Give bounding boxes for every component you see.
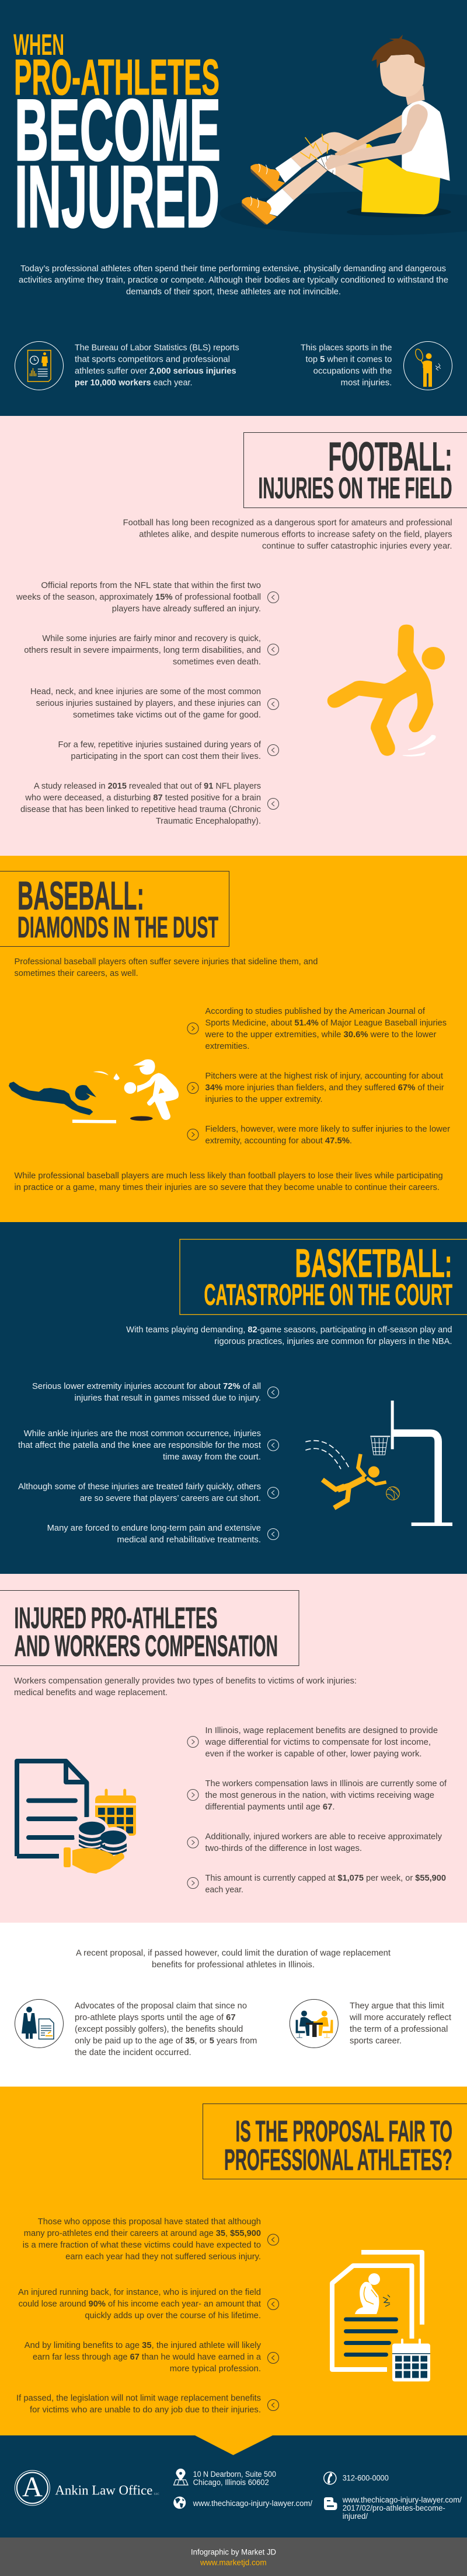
text: football introduction: Football has long been recognized as a dangerous sport for amateurs and professional [123, 518, 452, 527]
text: basketball introduction: rigorous practices, injuries are common for players in the NBA. [214, 1337, 452, 1346]
text: wage replacement point 1: In Illinois, wage replacement benefits are designed to provide [205, 1726, 438, 1735]
text: baseball point 2: 34% more injuries than fielders, and they suffered 67% of their [205, 1083, 444, 1093]
text: baseball point 1: were to the upper extremities, while 30.6% were to the lower [204, 1030, 437, 1040]
icon: document with clock and injured person [15, 342, 63, 390]
icon: chevron 2 [187, 1083, 198, 1093]
text: address: 10 N Dearborn, Suite 500 [193, 2470, 276, 2479]
icon: globe [173, 2497, 186, 2509]
title: When Pro-Athletes Become Injured: PRO-ATHLETES [14, 50, 219, 106]
icon: chevron 2 [187, 1790, 198, 1800]
icon: chevron 3 [187, 1129, 198, 1140]
text: top 5 occupations: occupations with the [313, 366, 392, 376]
text: basketball point 2 [18, 1429, 261, 1462]
text: advocates claim: pro-athlete plays sports until the age of 67 [75, 2013, 236, 2022]
panel: hero introduction [0, 0, 467, 416]
text: BLS statistic [75, 343, 239, 387]
text: fairness point 2: An injured running back, for instance, who is injured on the field [18, 2288, 261, 2297]
text: blog link: injured/ [343, 2512, 368, 2521]
text: football point 1 [16, 581, 261, 614]
text: workers compensation introduction [14, 1676, 357, 1698]
text: football point 1: Official reports from the NFL state that within the first two [41, 581, 261, 590]
text: wage replacement point 4: each year. [205, 1885, 243, 1895]
text: football point 5: Traumatic Encephalopathy). [156, 817, 261, 826]
text: basketball point 1: Serious lower extremity injuries account for about 72% of all [32, 1382, 261, 1391]
panel: workers compensation [0, 1574, 467, 1923]
text: football point 1: players have already suffered an injury. [112, 604, 261, 614]
icon: chevron 4 [267, 1528, 279, 1540]
heading: Football, injuries on the field [244, 433, 467, 508]
text: fairness point 4 [16, 2394, 261, 2415]
panel: baseball [0, 856, 467, 1222]
text: wage replacement point 4 [205, 1874, 446, 1895]
text: blog link: www.thechicago-injury-lawyer.com/ [342, 2496, 462, 2504]
text: introduction paragraph [19, 264, 448, 296]
text: football introduction: continue to suffer catastrophic injuries every year. [262, 541, 452, 551]
text: football point 2: others result in severe impairments, long term disabilities, and [24, 646, 261, 655]
text: wage replacement point 3: Additionally, injured workers are able to receive approximately [205, 1832, 442, 1842]
icon: chevron 3 [267, 699, 279, 709]
text: wage replacement point 1: wage differential for victims to compensate for lost income, [204, 1738, 431, 1747]
text: basketball point 4: medical and rehabilitative treatments. [117, 1535, 261, 1545]
text: football point 5: A study released in 2015 revealed that out of 91 NFL players [34, 782, 261, 791]
text: basketball point 1: injuries that result in games missed due to injury. [75, 1394, 261, 1403]
panel: credits [0, 2538, 467, 2576]
text: fairness point 1: is a mere fraction of what these victims could have expected to [23, 2241, 261, 2250]
text: basketball introduction: With teams playing demanding, 82-game seasons, participating in off-season play and [126, 1325, 452, 1335]
heading: Is the proposal fair to professional athletes? [203, 2104, 467, 2179]
icon: chevron 3 [267, 1488, 279, 1498]
illustration: falling football player [327, 625, 445, 757]
icon: chevron 1 [187, 1736, 198, 1748]
arrow: yellow notch pointing down [195, 2435, 273, 2455]
text: BLS statistic: per 10,000 workers each year. [75, 378, 193, 387]
text: fairness point 2: could lose around 90% of his income each year- an amount that [19, 2300, 261, 2309]
text: top 5 occupations: This places sports in the [301, 343, 392, 352]
text: fairness point 3: And by limiting benefits to age 35, the injured athlete will likely [25, 2341, 262, 2350]
text: BLS statistic: The Bureau of Labor Statistics (BLS) reports [75, 343, 239, 352]
text: blog link [342, 2496, 462, 2521]
text: fairness point 4: If passed, the legislation will not limit wage replacement benefits [16, 2394, 261, 2403]
icon: chevron 3 [267, 2352, 279, 2364]
text: football point 3: serious injuries sustained by players, and these injuries can [36, 699, 261, 708]
text: argument about the limit [349, 2001, 451, 2046]
text: argument about the limit: will more accurately reflect [349, 2013, 451, 2022]
text: basketball point 3 [18, 1482, 261, 1503]
text: wage replacement point 2 [205, 1779, 447, 1812]
text: baseball point 3 [205, 1125, 450, 1146]
text: football point 4: participating in the sport can cost them their lives. [71, 752, 261, 761]
text: top 5 occupations: top 5 when it comes to [306, 355, 392, 364]
text: baseball point 2: injuries to the upper extremity. [205, 1095, 323, 1104]
logo: Ankin Law Office: LLC [154, 2492, 159, 2496]
text: workers compensation introduction: medical benefits and wage replacement. [14, 1688, 168, 1698]
text: wage replacement point 2: the most generous in the nation, with victims receiving wage [205, 1791, 434, 1800]
text: introduction paragraph: Today’s professional athletes often spend their time performing extensive, physically demanding and dangerous [20, 264, 446, 274]
text: fairness point 1 [23, 2217, 261, 2262]
text: baseball point 3: Fielders, however, were more likely to suffer injuries to the lower [205, 1125, 450, 1134]
text: website: www.thechicago-injury-lawyer.com/ [193, 2499, 312, 2508]
logo: Ankin Law Office [15, 2470, 159, 2505]
text: baseball introduction [14, 957, 318, 978]
text: fairness point 1: Those who oppose this proposal have stated that although [38, 2217, 261, 2227]
text: basketball point 3: Although some of these injuries are treated fairly quickly, others [18, 1482, 261, 1492]
text: basketball point 3: are so severe that players’ careers are cut short. [80, 1494, 261, 1503]
text: infographic credit: Infographic by Market JD [191, 2548, 276, 2556]
icon: injured tennis player [404, 342, 452, 390]
icon: chevron 2 [267, 1440, 279, 1451]
icon: chevron 1 [267, 2234, 279, 2245]
text: argument about the limit: sports career. [350, 2036, 402, 2046]
text: credit website: www.marketjd.com [200, 2558, 267, 2567]
icon: judge and legal document [15, 2000, 63, 2048]
illustration: injured athlete sitting and holding knee [220, 34, 467, 235]
text: wage replacement point 1: even if the worker is capable of other, lower paying work. [205, 1749, 421, 1759]
text: wage replacement point 4: This amount is currently capped at $1,075 per week, or $55,900 [205, 1874, 446, 1883]
icon: chevron 4 [267, 744, 279, 756]
panel: football [0, 416, 467, 856]
panel: is the proposal fair [0, 2087, 467, 2435]
title: When Pro-Athletes Become Injured: WHEN [13, 28, 64, 61]
illustration: baseball player sliding to base [9, 1059, 179, 1124]
logo: Ankin Law Office: Ankin Law Office [55, 2483, 152, 2498]
text: basketball introduction [126, 1325, 452, 1346]
text: baseball closing paragraph: in practice or a game, many times their injuries are so severe that they become unable to continue their careers. [14, 1183, 440, 1192]
text: football point 3 [30, 687, 261, 720]
icon: chevron 3 [187, 1837, 198, 1848]
text: proposal statement [76, 1948, 391, 1969]
text: football point 5: disease that has been linked to repetitive head trauma (Chronic [20, 805, 261, 814]
text: baseball point 1: extremities. [205, 1042, 250, 1051]
panel: footer contact [0, 2435, 467, 2538]
text: baseball point 1: According to studies published by the American Journal of [205, 1007, 426, 1016]
text: football point 1: weeks of the season, approximately 15% of professional football [16, 593, 261, 602]
text: baseball point 1: Sports Medicine, about 51.4% of Major League Baseball injuries [205, 1019, 447, 1028]
icon: chevron 4 [187, 1877, 198, 1889]
text: basketball point 2: While ankle injuries are the most common occurrence, injuries [24, 1429, 261, 1438]
illustration: basketball player falling under hoop [305, 1401, 452, 1526]
text: BLS statistic: that sports competitors and professional [75, 355, 230, 364]
icon: chevron 5 [267, 798, 279, 810]
text: football introduction [123, 518, 452, 551]
text: baseball point 3: extremity, accounting for about 47.5%. [205, 1136, 352, 1146]
text: top 5 occupations: most injuries. [341, 378, 392, 387]
logo: Ankin Law Office: A [22, 2470, 43, 2502]
text: wage replacement point 3: two-thirds of the difference in lost wages. [205, 1844, 362, 1853]
text: baseball point 1 [204, 1007, 447, 1051]
text: fairness point 2: quickly adds up over the course of his lifetime. [85, 2311, 261, 2320]
text: top 5 occupations [301, 343, 392, 387]
text: workers compensation introduction: Workers compensation generally provides two types of benefits to victims of work injuries: [14, 1676, 357, 1686]
icon: chevron 1 [187, 1023, 198, 1034]
text: blog link: 2017/02/pro-athletes-become- [343, 2504, 445, 2512]
title: When Pro-Athletes Become Injured: INJURED [15, 147, 219, 246]
title: When Pro-Athletes Become Injured: BECOME [15, 80, 221, 178]
icon: map pin [174, 2469, 188, 2485]
text: wage replacement point 2: The workers compensation laws in Illinois are currently some of [205, 1779, 447, 1788]
text: address: Chicago, Illinois 60602 [193, 2478, 269, 2487]
text: baseball introduction: Professional baseball players often suffer severe injuries that sideline them, and [14, 957, 318, 967]
text: baseball closing paragraph [14, 1171, 443, 1192]
icon: blog [324, 2497, 337, 2510]
text: address [193, 2470, 276, 2487]
text: basketball point 4 [47, 1524, 261, 1545]
text: football point 2 [24, 634, 261, 667]
icon: chevron 2 [267, 2298, 279, 2310]
heading: Basketball, catastrophe on the court [180, 1239, 467, 1315]
text: argument about the limit: They argue that this limit [350, 2001, 444, 2011]
text: football point 5 [20, 782, 261, 826]
text: football point 4: For a few, repetitive injuries sustained during years of [58, 740, 262, 750]
text: wage replacement point 3 [205, 1832, 442, 1853]
text: football point 2: While some injuries are fairly minor and recovery is quick, [42, 634, 261, 643]
text: introduction paragraph: demands of their sport, these athletes are not invincible. [126, 287, 341, 296]
text: advocates claim [75, 2001, 257, 2057]
heading: Baseball, diamonds in the dust: DIAMONDS IN THE DUST [18, 911, 218, 944]
icon: chevron 1 [267, 592, 279, 603]
text: baseball closing paragraph: While professional baseball players are much less likely than football players to lose their lives while participating [14, 1171, 443, 1181]
text: basketball point 2: that affect the patella and the knee are responsible for the most [18, 1441, 261, 1450]
text: football point 4 [58, 740, 262, 761]
heading: Injured pro-athletes and workers compensation: INJURED PRO-ATHLETES [14, 1601, 217, 1634]
panel: basketball [0, 1222, 467, 1574]
text: BLS statistic: athletes suffer over 2,000 serious injuries [75, 366, 236, 376]
text: wage replacement point 1 [204, 1726, 438, 1759]
panel: recent proposal [0, 1923, 467, 2087]
illustration: document, calendar, coins and hand [17, 1761, 136, 1874]
text: football point 3: Head, neck, and knee injuries are some of the most common [30, 687, 261, 696]
title: When Pro-Athletes Become Injured [13, 28, 221, 246]
text: introduction paragraph: activities anytime they train, practice or compete. Although their bodies are typically conditioned to withstand the [19, 275, 448, 285]
text: football point 2: sometimes even death. [173, 657, 261, 667]
icon: chevron 2 [267, 644, 279, 655]
text: phone number: 312-600-0000 [343, 2473, 389, 2483]
heading: Baseball, diamonds in the dust: BASEBALL: [18, 873, 144, 918]
text: fairness point 3: earn far less through age 67 than he would have earned in a [33, 2353, 262, 2362]
icon: chevron 1 [267, 1387, 279, 1398]
text: proposal statement: A recent proposal, if passed however, could limit the duration of wage replacement [76, 1948, 391, 1958]
text: fairness point 4: for victims who are unable to do any job due to their injuries. [30, 2406, 261, 2415]
text: advocates claim: the date the incident occurred. [75, 2048, 191, 2057]
text: football introduction: athletes alike, and despite numerous efforts to increase safety on the field, players [139, 530, 452, 539]
text: fairness point 3: more typical profession. [170, 2364, 261, 2374]
text: fairness point 3 [25, 2341, 262, 2374]
text: basketball point 2: time away from the court. [163, 1452, 261, 1462]
text: proposal statement: benefits for professional athletes in Illinois. [152, 1960, 315, 1969]
text: basketball point 1 [32, 1382, 261, 1403]
text: fairness point 2 [18, 2288, 261, 2320]
text: wage replacement point 2: differential payments until age 67. [205, 1803, 335, 1812]
text: football point 3: sometimes take victims out of the game for good. [73, 710, 261, 720]
heading: Injured pro-athletes and workers compensation [0, 1590, 299, 1666]
illustration: injury report document with calendar [332, 2252, 430, 2381]
text: fairness point 1: many pro-athletes end their careers at around age 35, $55,900 [24, 2229, 261, 2238]
text: football point 5: who were deceased, a disturbing 87 tested positive for a brain [25, 793, 261, 803]
icon: chevron 4 [267, 2400, 279, 2410]
text: advocates claim: (except possibly golfers), the benefits should [75, 2025, 243, 2034]
text: fairness point 1: earn each year had they not suffered serious injury. [65, 2252, 261, 2262]
text: baseball point 2: Pitchers were at the highest risk of injury, accounting for about [205, 1072, 443, 1081]
text: advocates claim: Advocates of the proposal claim that since no [75, 2001, 247, 2011]
text: baseball introduction: sometimes their careers, as well. [14, 969, 138, 978]
text: baseball point 2 [205, 1072, 444, 1104]
text: basketball point 4: Many are forced to endure long-term pain and extensive [47, 1524, 261, 1533]
icon: telephone [324, 2472, 336, 2484]
text: advocates claim: only be paid up to the age of 35, or 5 years from [75, 2036, 257, 2046]
icon: two people at a table [290, 2000, 338, 2048]
heading: Baseball, diamonds in the dust [0, 872, 229, 946]
text: argument about the limit: the term of a professional [350, 2025, 448, 2034]
